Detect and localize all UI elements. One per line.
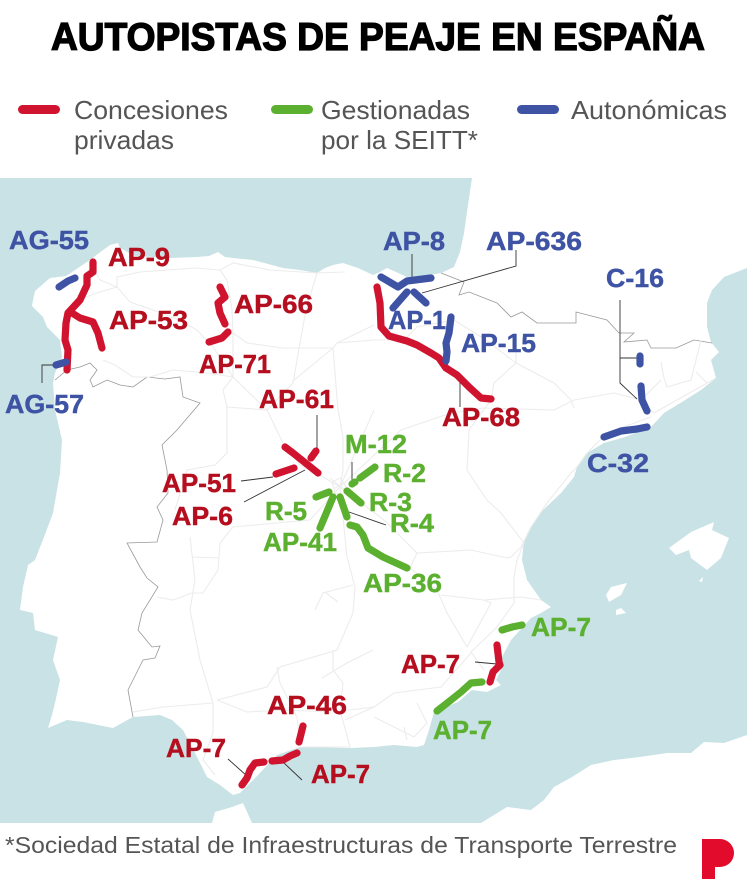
route: R-3 [347,491,361,503]
route: AP-41 [320,497,333,528]
route: AP-66 [218,287,225,324]
label: R-2: R-2 [383,458,426,488]
label: AP-71: AP-71 [199,349,271,379]
route: AP-1 [393,292,407,308]
land: North Africa [481,735,747,823]
label: AG-57: AG-57 [5,389,84,419]
map [0,178,747,823]
route: AP-53 [72,313,102,348]
sea [0,178,747,823]
label: AP-51: AP-51 [162,468,236,498]
label: R-4: R-4 [390,508,435,538]
legend: concesiones privadas [18,95,228,155]
label: AP-53: AP-53 [109,305,188,335]
route: AP-71 [209,332,228,342]
route: AP-7 Alicante-Cartagena [490,645,500,682]
route: AP-8 [381,277,431,287]
legend: concesiones privadas: Concesiones [74,95,228,125]
route: AP-7 Málaga-Estepona [272,753,297,761]
logo [702,839,734,879]
label: AP-7 Alicante: AP-7 [531,612,591,642]
route: AP-7 Estepona-Guadiaro [242,762,264,785]
label: AP-7 Málaga: AP-7 [311,759,370,789]
land: Cabrera [699,577,703,582]
legend [18,95,727,155]
label: M-12: M-12 [345,429,407,459]
land: Mallorca [669,522,729,570]
route: AP-61 [311,451,316,458]
label: AP-36: AP-36 [363,568,442,598]
route: AP-7 Cartagena-Vera [437,682,482,711]
route: AP-51 [276,468,294,474]
label: AP-9: AP-9 [108,242,170,272]
leader lines [42,250,637,780]
label: AP-61: AP-61 [259,384,334,414]
label: AP-7 Almería: AP-7 [433,715,492,745]
legend: concesiones privadas: privadas [74,125,174,155]
route: AG-55 [59,278,75,287]
land: Iberian peninsula and France [20,178,747,795]
footnote: *Sociedad Estatal de Infraestructuras de Transporte Terrestre [5,832,677,858]
label: C-16: C-16 [606,263,664,293]
title: AUTOPISTAS DE PEAJE EN ESPAÑA [51,15,705,59]
label: AG-55: AG-55 [9,225,89,255]
route: AG-57 [56,362,66,365]
route: AP-68 [377,287,491,399]
route: AP-6 [285,447,318,473]
label: AP-7 Murcia: AP-7 [401,649,460,679]
route: AP-46 [299,726,303,742]
land: Formentera [616,608,626,615]
route: M-12 [352,482,355,484]
legend: gestionadas por la SEITT [271,95,478,155]
label: C-32: C-32 [587,448,649,478]
label: AP-6: AP-6 [172,501,233,531]
label: R-5: R-5 [265,496,307,526]
label: AP-15: AP-15 [461,328,536,358]
route: AP-36 [350,525,407,568]
route: AP-636 [414,292,426,303]
route: C-16 [640,356,647,411]
legend: autonómicas: Autonómicas [571,95,727,125]
label: AP-1: AP-1 [388,305,446,335]
label: AP-68: AP-68 [442,402,520,432]
land: Ibiza [606,583,627,602]
legend: gestionadas por la SEITT: Gestionadas [321,95,470,125]
label: AP-46: AP-46 [267,690,347,720]
label: AP-41: AP-41 [263,527,337,557]
route: R-5 [316,492,329,497]
route: R-2 [360,467,375,478]
route: AP-15 [446,317,451,361]
label: AP-636: AP-636 [486,226,582,256]
route: AP-7 Alicante [502,625,522,630]
legend: gestionadas por la SEITT: por la SEITT* [321,125,478,155]
route: AP-9 [65,262,93,370]
land: Ceuta [212,803,252,823]
label: AP-8: AP-8 [383,226,445,256]
route: R-4 [340,497,347,517]
route: C-32 [604,427,647,437]
borders [55,273,712,717]
label: R-3: R-3 [369,487,412,517]
label: AP-66: AP-66 [234,289,313,319]
label: AP-7 Cádiz: AP-7 [166,733,226,763]
road network [77,263,716,775]
